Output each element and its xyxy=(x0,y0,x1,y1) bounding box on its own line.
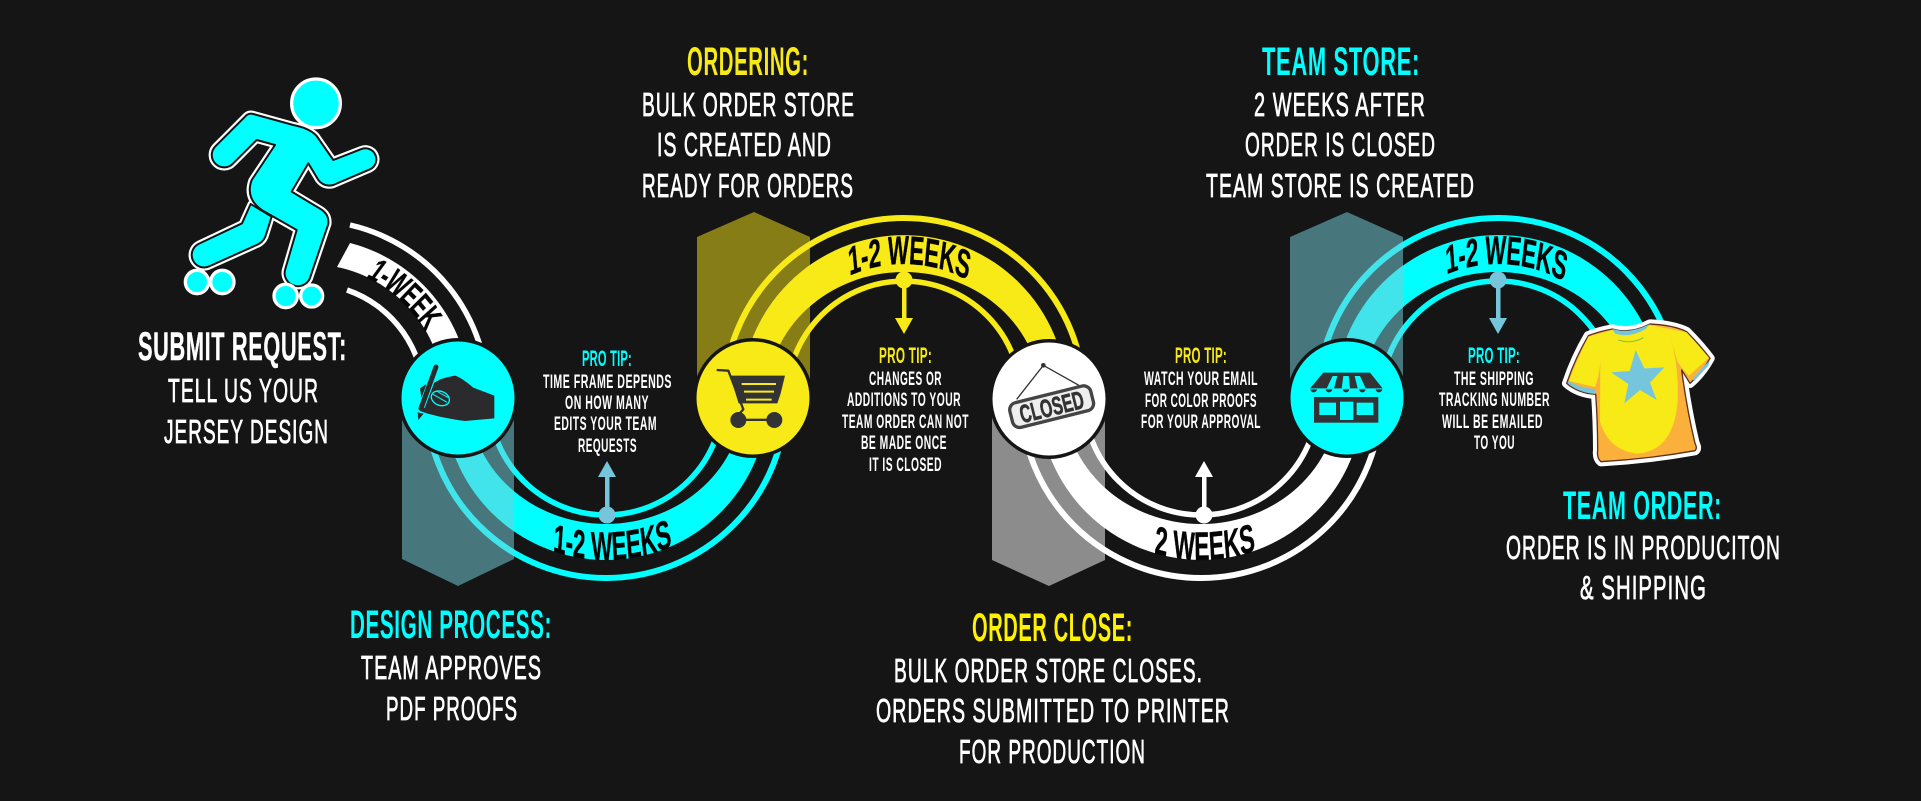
text block: team order xyxy=(1506,484,1781,607)
label: 1-2 WEEKS team store: 1-2 WEEKS xyxy=(1446,236,1568,280)
text block: design process: PDF PROOFS xyxy=(386,691,518,728)
pro tip: shipping: TO YOU xyxy=(1474,432,1515,454)
text block: order close: BULK ORDER STORE CLOSES. xyxy=(894,653,1203,690)
text block: team store: ORDER IS CLOSED xyxy=(1245,127,1436,164)
panel: ordering ribbon xyxy=(697,212,810,398)
pro tip: time frame: PRO TIP: xyxy=(582,346,632,371)
pro tip: email: FOR YOUR APPROVAL xyxy=(1141,411,1261,433)
pro tip: changes xyxy=(842,343,969,476)
text block: submit request: SUBMIT REQUEST: xyxy=(138,325,347,369)
arrow: design pro tip xyxy=(598,461,616,524)
track: team store cyan arc xyxy=(1318,218,1678,398)
arrow: ordering pro tip xyxy=(895,272,913,334)
text block: submit request xyxy=(138,325,347,451)
pro tip: shipping: WILL BE EMAILED xyxy=(1442,411,1543,433)
text block: team order: TEAM ORDER: xyxy=(1563,484,1722,528)
pro tip: email xyxy=(1141,343,1261,433)
pro tip: time frame: EDITS YOUR TEAM xyxy=(554,413,657,435)
icon: closed sign: CLOSED xyxy=(1017,386,1087,429)
track overlay: lightened cyan inside team store ribbon xyxy=(1324,242,1403,358)
text block: team store: TEAM STORE IS CREATED xyxy=(1206,168,1475,205)
arrow: team store pro tip xyxy=(1489,272,1507,334)
icon: roller skater xyxy=(185,79,376,308)
step circle: cart xyxy=(693,338,813,458)
text block: team store: 2 WEEKS AFTER xyxy=(1254,87,1426,124)
pro tip: shipping: THE SHIPPING xyxy=(1454,368,1534,390)
step circle: store xyxy=(1287,338,1407,458)
pro tip: changes: CHANGES OR xyxy=(869,368,942,390)
pro tip: time frame: TIME FRAME DEPENDS xyxy=(543,371,672,393)
pro tip: changes: TEAM ORDER CAN NOT xyxy=(842,411,969,433)
text block: submit request: JERSEY DESIGN xyxy=(164,414,329,451)
step circle: pen hand xyxy=(398,338,518,458)
pro tip: shipping: TRACKING NUMBER xyxy=(1439,389,1550,411)
text block: ordering xyxy=(642,40,855,205)
track: order close white arc xyxy=(1021,398,1381,578)
label: 1-2 WEEKS design: 1-2 WEEKS xyxy=(554,520,671,560)
text block: design process: DESIGN PROCESS: xyxy=(350,603,552,647)
text block: ordering: READY FOR ORDERS xyxy=(642,168,854,205)
text block: team store xyxy=(1206,40,1475,205)
text block: ordering: BULK ORDER STORE xyxy=(642,87,855,124)
pro tip: changes: PRO TIP: xyxy=(879,343,932,368)
pro tip: time frame xyxy=(543,346,672,457)
pro tip: changes: ADDITIONS TO YOUR xyxy=(847,389,961,411)
text block: order close xyxy=(876,606,1230,771)
text block: submit request: TELL US YOUR xyxy=(168,373,319,410)
panel: design process ribbon xyxy=(402,398,514,586)
text block: team store: TEAM STORE: xyxy=(1262,40,1420,84)
text block: ordering: IS CREATED AND xyxy=(657,127,832,164)
panel: order close ribbon xyxy=(992,398,1105,586)
pro tip: email: FOR COLOR PROOFS xyxy=(1145,390,1257,412)
pro tip: email: WATCH YOUR EMAIL xyxy=(1144,368,1258,390)
label: 1-WEEK: 1-WEEK xyxy=(366,260,443,332)
text block: order close: FOR PRODUCTION xyxy=(959,734,1146,771)
label: 2 WEEKS: 2 WEEKS xyxy=(1154,524,1254,560)
pro tip: changes: BE MADE ONCE xyxy=(861,432,947,454)
pro tip: changes: IT IS CLOSED xyxy=(869,454,942,476)
arrow: order close pro tip xyxy=(1195,461,1213,524)
label: 1-2 WEEKS ordering: 1-2 WEEKS xyxy=(848,236,970,278)
track: design process cyan arc xyxy=(426,398,786,578)
icon: hand writing xyxy=(418,367,494,421)
text block: order close: ORDERS SUBMITTED TO PRINTER xyxy=(876,693,1230,730)
step circle: closed sign xyxy=(989,339,1109,459)
track: ordering yellow arc xyxy=(724,218,1084,398)
text block: order close: ORDER CLOSE: xyxy=(972,606,1133,650)
text block: design process xyxy=(350,603,552,728)
pro tip: shipping: PRO TIP: xyxy=(1468,343,1520,368)
panel: team store ribbon xyxy=(1290,212,1403,398)
icon: t-shirt xyxy=(1567,324,1710,462)
pro tip: email: PRO TIP: xyxy=(1175,343,1227,368)
pro tip: time frame: REQUESTS xyxy=(578,435,637,457)
text block: design process: TEAM APPROVES xyxy=(361,650,542,687)
text block: team order: & SHIPPING xyxy=(1580,570,1707,607)
text block: ordering: ORDERING: xyxy=(687,40,809,84)
pro tip: shipping xyxy=(1439,343,1550,454)
track overlay: lightened cyan inside ribbon xyxy=(431,440,514,556)
icon: storefront xyxy=(1310,373,1383,423)
icon: shopping cart xyxy=(717,370,785,428)
track: 1-week white arc xyxy=(337,225,488,398)
pro tip: time frame: ON HOW MANY xyxy=(565,392,649,414)
